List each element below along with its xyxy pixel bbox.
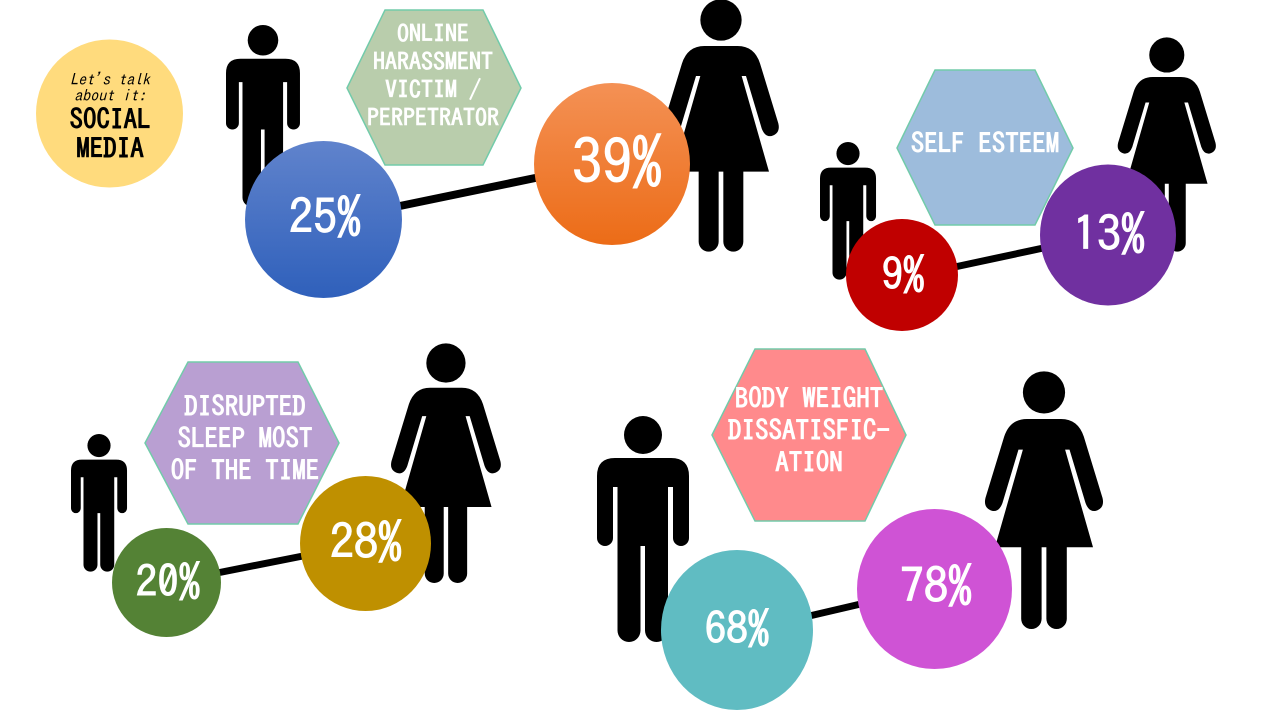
title badge: Let's talk about it: Social Media: Let's talk: [70, 71, 151, 87]
stat circle: male 25%: 25%: [289, 192, 361, 240]
panel: self esteem: [820, 37, 1216, 331]
stat circle: male 25%: [245, 141, 402, 298]
stat circle: female 28%: 28%: [330, 517, 402, 565]
stat circle: male 20%: [112, 528, 221, 637]
icon: male figure: [820, 142, 876, 280]
panel: disrupted sleep: [71, 343, 501, 637]
icon: male figure: [71, 434, 127, 572]
hexagon label: disrupted sleep most of the time: DISRUPTED: [184, 393, 306, 420]
icon: female figure: [1118, 37, 1216, 252]
title badge: Let's talk about it: Social Media: MEDIA: [76, 135, 144, 162]
stat circle: male 68%: [661, 550, 813, 710]
hexagon label: body weight dissatisfaction: [712, 349, 906, 521]
connector line: [212, 555, 308, 574]
connector line: [950, 247, 1048, 268]
hexagon label: disrupted sleep most of the time: [145, 362, 339, 524]
hexagon label: body weight dissatisfaction: BODY WEIGHT: [735, 385, 883, 412]
stat circle: female 78%: [857, 509, 1012, 669]
hexagon label: disrupted sleep most of the time: OF THE TIME: [171, 457, 319, 484]
panel: online harassment: [226, 0, 779, 298]
stat circle: female 39%: 39%: [572, 132, 662, 192]
stat circle: female 39%: [534, 83, 690, 245]
hexagon label: self esteem: SELF ESTEEM: [911, 130, 1059, 157]
stat circle: female 78%: 78%: [900, 561, 972, 609]
icon: male figure: [597, 416, 689, 642]
hexagon label: self esteem: [897, 70, 1073, 225]
hexagon label: online harassment victim / perpetrator: HARASSMENT: [373, 49, 493, 73]
connector line: [805, 603, 865, 617]
title badge: Let's talk about it: Social Media: SOCIAL: [70, 106, 150, 133]
stat circle: male 9%: 9%: [882, 253, 924, 296]
connector line: [395, 177, 540, 207]
title badge: Let's talk about it: Social Media: [36, 40, 183, 188]
stat circle: male 20%: 20%: [136, 560, 200, 603]
stat circle: female 13%: 13%: [1073, 209, 1145, 257]
title badge: Let's talk about it: Social Media: about it:: [74, 87, 146, 103]
hexagon label: disrupted sleep most of the time: SLEEP MOST: [178, 425, 312, 452]
hexagon label: online harassment victim / perpetrator: VICTIM /: [385, 77, 481, 101]
hexagon label: online harassment victim / perpetrator: [347, 10, 521, 165]
stat circle: female 13%: [1040, 164, 1176, 306]
hexagon label: body weight dissatisfaction: DISSATISFIC-: [728, 417, 890, 444]
icon: female figure: [985, 371, 1103, 629]
hexagon label: online harassment victim / perpetrator: PERPETRATOR: [367, 105, 499, 129]
stat circle: female 28%: [300, 476, 431, 611]
stat circle: male 68%: 68%: [705, 607, 769, 650]
panel: body weight dissatisfaction: [597, 349, 1103, 710]
icon: female figure: [391, 343, 501, 583]
hexagon label: body weight dissatisfaction: ATION: [774, 449, 843, 476]
hexagon label: online harassment victim / perpetrator: ONLINE: [397, 21, 469, 45]
icon: male figure: [226, 25, 300, 207]
icon: female figure: [663, 0, 779, 252]
stat circle: male 9%: [846, 219, 958, 331]
